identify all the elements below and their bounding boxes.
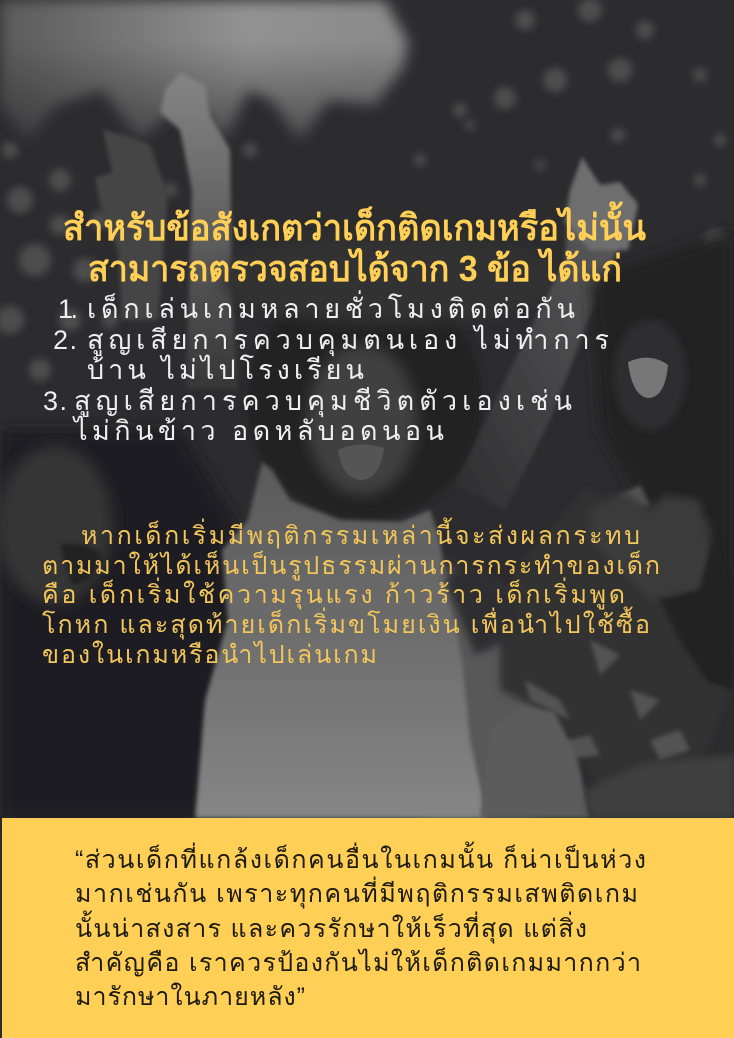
paragraph: consequences: คือ เด็กเริ่มใช้ความรุนแรง ก้าวร้าว เด็กเริ่มพูด bbox=[42, 577, 625, 610]
centre child's dress bbox=[195, 462, 487, 818]
panel: yellow quote box bbox=[2, 818, 734, 1038]
title: สามารถตรวจสอบได้จาก 3 ข้อ ได้แก่ bbox=[88, 247, 622, 289]
quote text: สำคัญคือ เราควรป้องกันไม่ให้เด็กติดเกมมากกว่า bbox=[75, 947, 641, 977]
paragraph: consequences: ตามมาให้ได้เห็นเป็นรูปธรรมผ่านการกระทำของเด็ก bbox=[42, 550, 660, 581]
right raised arm bbox=[455, 190, 635, 510]
list of three signs: เด็กเล่นเกมหลายชั่วโมงติดต่อกัน bbox=[87, 290, 575, 324]
left child's hair bbox=[0, 430, 235, 820]
left fist bbox=[95, 130, 168, 320]
right child's mouth bbox=[628, 358, 668, 398]
paragraph: consequences: โกหก และสุดท้ายเด็กเริ่มขโมยเงิน เพื่อนำไปใช้ซื้อ bbox=[42, 606, 650, 640]
title bbox=[63, 201, 646, 289]
raised arm and fist bbox=[160, 73, 238, 390]
knee bbox=[480, 705, 590, 818]
right fist bbox=[565, 157, 638, 250]
list of three signs: 3. bbox=[43, 386, 67, 416]
title: สำหรับข้อสังเกตว่าเด็กติดเกมหรือไม่นั้น bbox=[63, 201, 646, 248]
list of three signs: สูญเสียการควบคุมชีวิตตัวเองเช่น bbox=[74, 386, 572, 418]
ground behind bbox=[420, 560, 560, 818]
quote text: “ส่วนเด็กที่แกล้งเด็กคนอื่นในเกมนั้น ก็น่าเป็นห่วง bbox=[75, 841, 646, 874]
quote text bbox=[75, 841, 646, 1011]
left child's mouth bbox=[60, 544, 102, 585]
right child's face bbox=[614, 320, 686, 430]
left child's face bbox=[0, 445, 113, 605]
paragraph: consequences bbox=[42, 517, 660, 669]
list of three signs: 1. bbox=[58, 294, 78, 324]
list of three signs: ไม่กินข้าว อดหลับอดนอน bbox=[72, 416, 444, 446]
right child's camo shirt bbox=[500, 490, 734, 790]
mouth bbox=[338, 444, 384, 480]
quote text: มากเช่นกัน เพราะทุกคนที่มีพฤติกรรมเสพติดเกม bbox=[75, 876, 638, 909]
list of three signs: บ้าน ไม่ไปโรงเรียน bbox=[87, 355, 364, 385]
hair, upper band bbox=[220, 235, 560, 325]
paragraph: consequences: หากเด็กเริ่มมีพฤติกรรมเหล่านี้จะส่งผลกระทบ bbox=[81, 517, 640, 550]
leg bbox=[585, 755, 734, 818]
sky and tree line bbox=[0, 0, 408, 140]
right child's hair bbox=[590, 230, 734, 620]
paragraph: consequences: ของในเกมหรือนำไปเล่นเกม bbox=[42, 640, 377, 669]
right child's hands bbox=[590, 492, 712, 600]
list of three signs bbox=[43, 290, 609, 446]
camo patches bbox=[525, 485, 690, 760]
quote text: มารักษาในภายหลัง” bbox=[75, 982, 305, 1011]
list of three signs: 2. bbox=[53, 325, 77, 355]
right child's dark sleeve bbox=[660, 540, 734, 690]
bokeh foliage bbox=[0, 0, 726, 381]
quote text: นั้นน่าสงสาร และควรรักษาให้เร็วที่สุด แต่สิ่ง bbox=[75, 910, 587, 944]
left forearm bbox=[445, 560, 520, 655]
centre child's face bbox=[307, 345, 417, 495]
list of three signs: สูญเสียการควบคุมตนเอง ไม่ทำการ bbox=[87, 325, 609, 357]
dark hair, centre child bbox=[247, 280, 483, 520]
